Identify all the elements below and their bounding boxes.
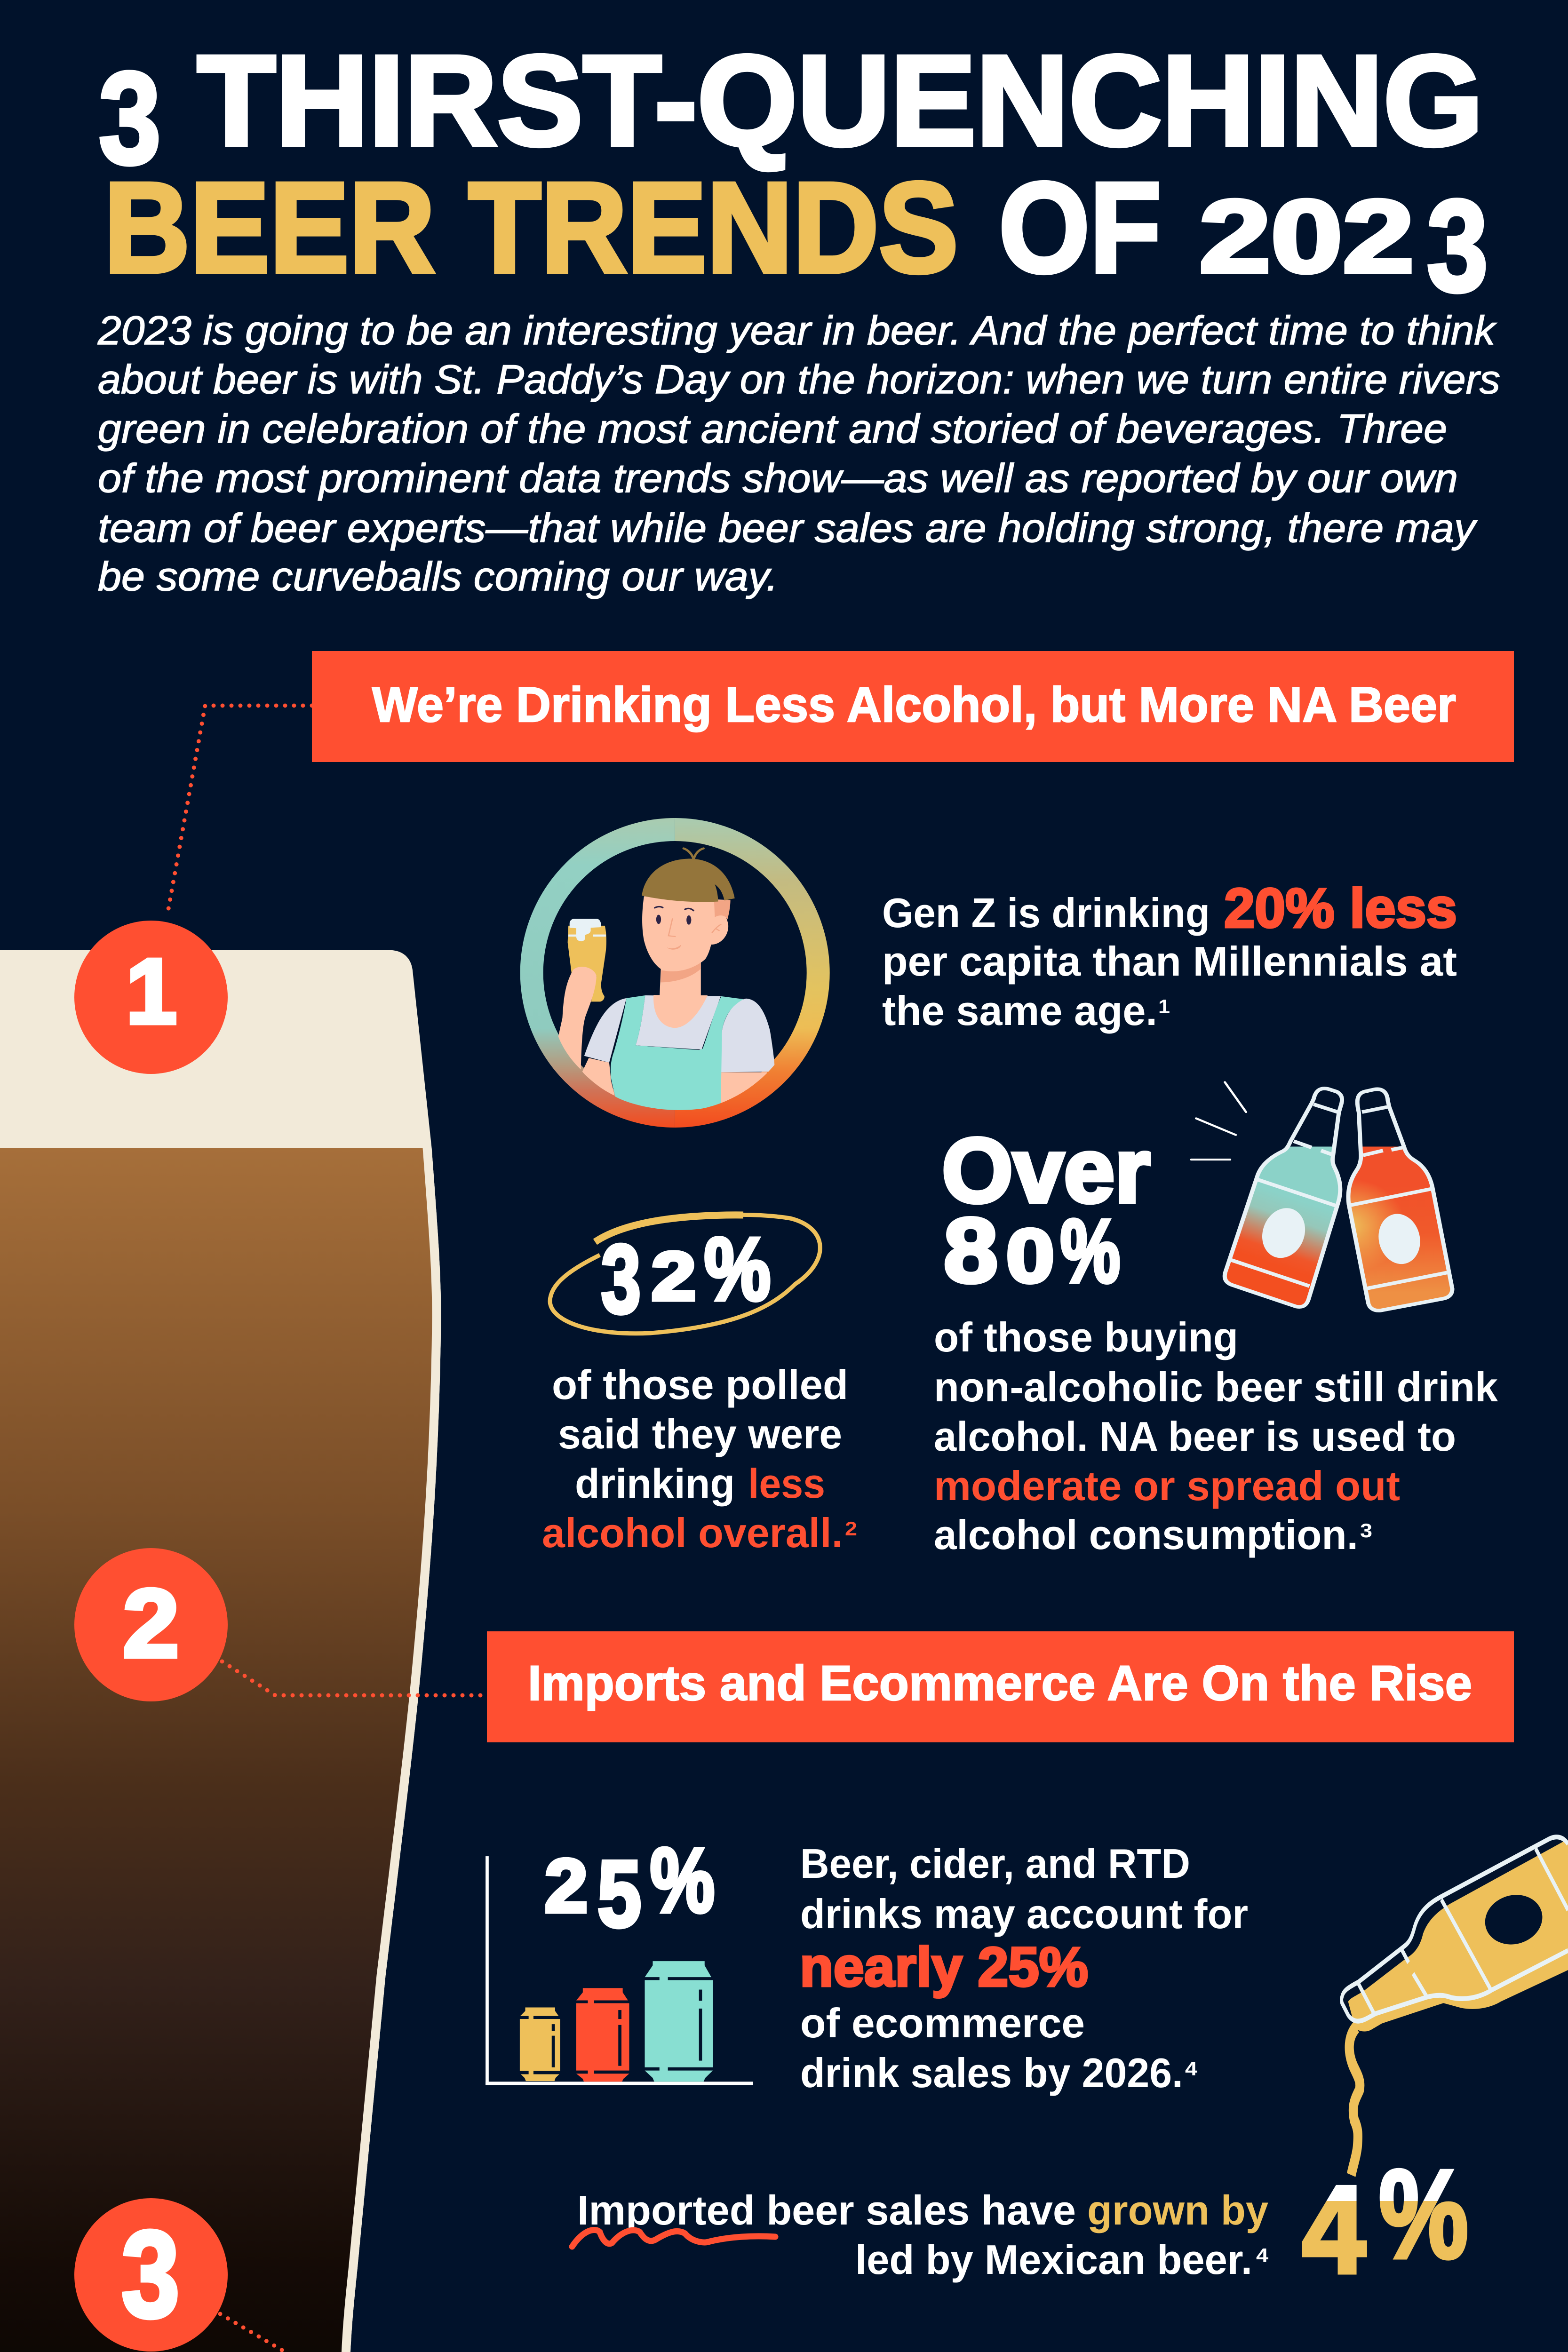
text: Gen Z stat bbox=[882, 877, 1457, 1034]
title: 3 bbox=[99, 45, 161, 191]
intro paragraph: of the most prominent data trends show—as well as reported by our own bbox=[98, 456, 1458, 501]
chart: cans with 25%: % bbox=[650, 1829, 715, 1931]
text: of those buying bbox=[934, 1314, 1498, 1558]
intro paragraph: team of beer experts—that while beer sales are holding strong, there may bbox=[98, 506, 1478, 551]
title bbox=[99, 29, 1488, 318]
chart: cans with 25%: 5 bbox=[597, 1842, 641, 1947]
connector 2 bbox=[222, 1661, 487, 1695]
text: ecommerce stat: Beer, cider, and RTD bbox=[800, 1840, 1190, 1887]
stat: over 80%: % bbox=[1060, 1201, 1120, 1301]
text: of those buying: moderate or spread out bbox=[934, 1462, 1400, 1509]
text: imported beer stat bbox=[572, 2187, 1269, 2283]
number 2 badge bbox=[74, 1548, 228, 1701]
squiggle underline bbox=[572, 2230, 775, 2247]
intro paragraph: 2023 is going to be an interesting year in beer. And the perfect time to think bbox=[97, 308, 1497, 353]
stat: over 80%: 0 bbox=[1006, 1214, 1054, 1298]
text: of those polled: said they were bbox=[558, 1411, 842, 1457]
banner 1 bbox=[312, 651, 1514, 762]
intro paragraph: be some curveballs coming our way. bbox=[98, 554, 778, 599]
title: THIRST-QUENCHING bbox=[197, 29, 1483, 172]
text: of those polled bbox=[542, 1361, 857, 1556]
text: of those polled: of those polled bbox=[552, 1361, 848, 1408]
text: ecommerce stat: nearly 25% bbox=[800, 1936, 1088, 1998]
stat: 32% circled: 2 bbox=[652, 1238, 696, 1314]
icon: clinking bottles bbox=[1191, 1082, 1452, 1311]
stat: 4%: 4 bbox=[1302, 2160, 1367, 2299]
text: ecommerce stat bbox=[800, 1840, 1248, 2096]
number 3 badge: 3 bbox=[121, 2205, 180, 2343]
number 2 badge: 2 bbox=[123, 1569, 179, 1677]
text: Gen Z stat: 20% less bbox=[1224, 877, 1457, 939]
text: of those buying: alcohol consumption. bbox=[934, 1511, 1358, 1558]
text: ecommerce stat: drinks may account for bbox=[800, 1891, 1248, 1937]
title: 3 bbox=[1427, 173, 1488, 318]
text: Gen Z stat: per capita than Millennials at bbox=[882, 938, 1457, 985]
stat: 32% circled: % bbox=[704, 1220, 771, 1319]
intro paragraph: about beer is with St. Paddy’s Day on the horizon: when we turn entire rivers bbox=[98, 357, 1500, 402]
text: imported beer stat: grown by bbox=[1087, 2187, 1268, 2233]
intro paragraph: green in celebration of the most ancient and storied of beverages. Three bbox=[98, 406, 1447, 452]
number 3 badge bbox=[74, 2198, 228, 2352]
number 1 badge bbox=[74, 921, 228, 1074]
text: of those polled: alcohol overall. bbox=[542, 1510, 843, 1556]
title: 202 bbox=[1199, 179, 1414, 294]
text: Gen Z stat: the same age. bbox=[882, 987, 1157, 1034]
text: of those buying: 3 bbox=[1360, 1519, 1372, 1542]
icon: person with beer in ring bbox=[532, 830, 818, 1116]
number 1 badge: 1 bbox=[126, 940, 177, 1043]
text: of those polled: drinking bbox=[575, 1460, 735, 1507]
icon: pouring bottle bbox=[1342, 1837, 1568, 2175]
connector 3 bbox=[220, 2314, 430, 2352]
stat: 4% bbox=[1302, 2144, 1468, 2299]
banner 1: We’re Drinking Less Alcohol, but More NA Beer bbox=[372, 677, 1456, 732]
title: BEER TRENDS bbox=[104, 156, 958, 299]
stat: 32% circled: 3 bbox=[601, 1225, 641, 1333]
text: of those polled: 2 bbox=[845, 1518, 857, 1540]
title: OF bbox=[999, 156, 1161, 299]
text: imported beer stat: Imported beer sales have bbox=[577, 2187, 1076, 2233]
intro paragraph bbox=[97, 308, 1500, 599]
text: Gen Z stat: Gen Z is drinking bbox=[882, 890, 1210, 936]
banner 2: Imports and Ecommerce Are On the Rise bbox=[528, 1656, 1472, 1711]
beer glass bbox=[0, 954, 437, 2352]
stat: over 80% bbox=[942, 1120, 1150, 1302]
stat: over 80%: 8 bbox=[944, 1200, 998, 1302]
stat: 32% circled bbox=[550, 1215, 820, 1334]
connector 1 bbox=[167, 706, 312, 917]
text: imported beer stat: 4 bbox=[1256, 2244, 1269, 2266]
chart: cans with 25%: 2 bbox=[545, 1843, 588, 1928]
banner 2 bbox=[487, 1631, 1514, 1742]
text: ecommerce stat: drink sales by 2026. bbox=[800, 2050, 1183, 2096]
text: of those buying: non-alcoholic beer still drink bbox=[934, 1364, 1498, 1410]
text: Gen Z stat: 1 bbox=[1158, 995, 1170, 1017]
text: of those polled: less bbox=[748, 1460, 825, 1507]
text: of those buying: of those buying bbox=[934, 1314, 1238, 1360]
text: imported beer stat: led by Mexican beer. bbox=[855, 2236, 1252, 2283]
text: ecommerce stat: 4 bbox=[1185, 2058, 1198, 2080]
chart: cans with 25% bbox=[486, 1829, 753, 2085]
text: of those buying: alcohol. NA beer is used to bbox=[934, 1413, 1456, 1460]
text: ecommerce stat: of ecommerce bbox=[800, 2000, 1085, 2046]
stat: over 80%: Over bbox=[942, 1120, 1150, 1222]
stat: 4%: % bbox=[1379, 2144, 1468, 2284]
